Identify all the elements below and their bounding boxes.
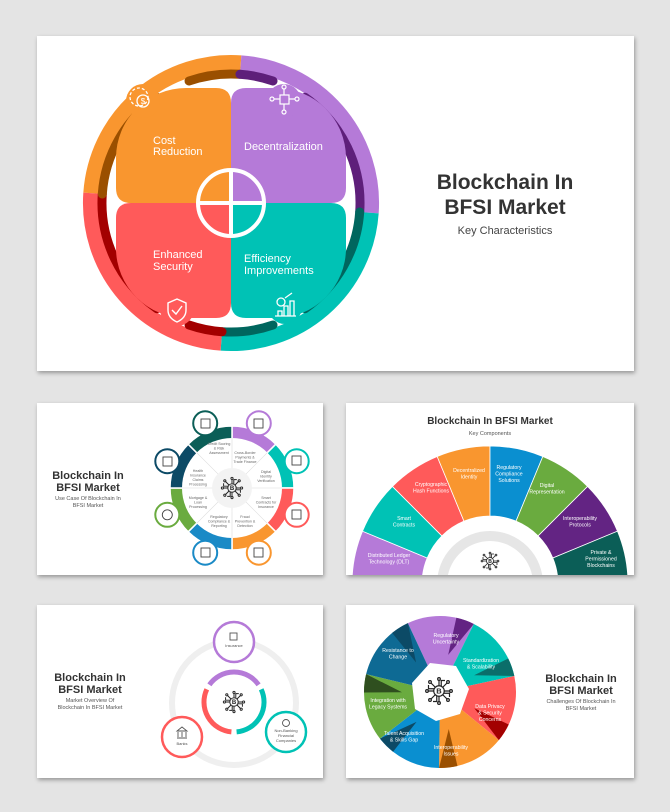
dark inner arcs: [102, 74, 360, 332]
fan labels: Hash Functions: [413, 488, 449, 494]
pinwheel labels: Regulatory: [433, 633, 459, 639]
pinwheel: [344, 598, 527, 786]
fan labels: Cryptographic: [415, 482, 448, 488]
use case labels: Assessment: [209, 451, 229, 455]
use case labels: Insurance: [190, 474, 206, 478]
pinwheel labels: Data Privacy: [475, 704, 505, 710]
title: Blockchain In BFSI Market: [427, 416, 553, 427]
ring: [157, 413, 307, 563]
pinwheel labels: Issues: [444, 752, 459, 758]
title: BFSI Market: [444, 196, 566, 219]
fan labels: Representation: [529, 490, 565, 496]
icon: gear dollar: [130, 88, 149, 107]
fan chart: [352, 446, 628, 575]
title: Key Components: [469, 431, 511, 437]
use case labels: Processing: [189, 482, 207, 486]
cycle diagram: Companies: [276, 738, 296, 743]
title: BFSI Market: [56, 482, 120, 494]
use case labels: Processing: [189, 505, 207, 509]
fan labels: Technology (DLT): [369, 560, 410, 566]
title: Market Overview Of: [66, 698, 115, 704]
use case labels: [189, 442, 277, 528]
labels: Efficiency: [244, 253, 291, 265]
use case labels: Detection: [237, 524, 253, 528]
slide: key components: [344, 402, 638, 580]
slide: use cases: [37, 403, 323, 575]
pinwheel labels: Concerns: [479, 717, 502, 723]
pinwheel labels: Legacy Systems: [369, 704, 407, 710]
icon: chart: [275, 293, 296, 316]
use case labels: Credit Scoring: [208, 442, 230, 446]
fan labels: [368, 465, 617, 569]
pinwheel labels: Uncertainty: [433, 640, 460, 646]
fan labels: Interoperability: [563, 516, 597, 522]
slide: challenges: [344, 598, 634, 786]
use case labels: Payments &: [235, 456, 255, 460]
labels: Decentralization: [244, 141, 323, 153]
title: Blockchain In: [52, 470, 124, 482]
icon: shield: [168, 299, 186, 322]
cycle diagram: Financial: [278, 733, 294, 738]
pinwheel labels: Resistance to: [382, 648, 414, 654]
labels: Reduction: [153, 146, 203, 158]
cycle diagram: Banks: [176, 741, 188, 746]
title: [545, 673, 617, 712]
pinwheel labels: Talent Acquisition: [384, 731, 424, 737]
fan labels: Identity: [461, 474, 478, 480]
fan labels: Regulatory: [496, 465, 522, 471]
use case labels: & Risk: [214, 446, 224, 450]
main slide: [37, 36, 634, 371]
title: [427, 416, 553, 437]
use case labels: Verification: [257, 479, 275, 483]
title: Blockchain In: [54, 672, 126, 684]
title: BFSI Market: [58, 684, 122, 696]
pinwheel labels: Change: [389, 654, 407, 660]
labels: Cost: [153, 135, 176, 147]
cycle diagram: [162, 622, 306, 765]
cycle diagram: Insurance: [225, 643, 244, 648]
labels: Improvements: [244, 265, 314, 277]
pinwheel labels: & Skills Gap: [390, 738, 418, 744]
use case labels: Trade Finance: [233, 460, 257, 464]
fan labels: Digital: [540, 483, 554, 489]
title: Challenges Of Blockchain In: [546, 699, 616, 705]
use case labels: Contracts for: [256, 500, 277, 504]
use case labels: Smart: [261, 496, 271, 500]
fan labels: Protocols: [569, 522, 591, 528]
labels: Security: [153, 261, 193, 273]
fan labels: Compliance: [495, 472, 523, 478]
cycle diagram: Non-Banking: [274, 728, 298, 733]
use case labels: Claims: [193, 478, 204, 482]
pinwheel labels: [369, 633, 505, 758]
title: [54, 672, 126, 711]
title: BFSI Market: [549, 685, 613, 697]
title: Blockchain In BFSI Market: [58, 705, 123, 711]
fan labels: Distributed Ledger: [368, 553, 410, 559]
pinwheel labels: Integration with: [370, 698, 406, 704]
title: Key Characteristics: [458, 225, 553, 237]
title: Blockchain In: [437, 171, 573, 194]
outer ring band: [91, 63, 371, 343]
title: BFSI Market: [73, 503, 104, 509]
title: Use Case Of Blockchain In: [55, 496, 121, 502]
use case labels: Prevention &: [235, 520, 256, 524]
slide: market overview: [37, 605, 323, 778]
fan labels: Smart: [397, 516, 411, 522]
use case labels: Mortgage &: [189, 496, 208, 500]
labels: [153, 135, 323, 277]
use case labels: Digital: [261, 470, 271, 474]
icon circles: [155, 411, 309, 565]
use case labels: Loan: [194, 500, 202, 504]
fan labels: Permissioned: [585, 556, 617, 562]
use case labels: Reporting: [211, 524, 227, 528]
fan labels: Solutions: [498, 478, 520, 484]
labels: Enhanced: [153, 249, 203, 261]
use case labels: Fraud: [240, 515, 250, 519]
pinwheel labels: Standardization: [463, 658, 499, 664]
title: [437, 171, 573, 237]
use case labels: Regulatory: [210, 515, 228, 519]
pinwheel labels: & Security: [478, 710, 502, 716]
fan labels: Contracts: [393, 522, 416, 528]
fan labels: Private &: [590, 550, 612, 556]
pinwheel labels: & Scalability: [467, 664, 496, 670]
title: Blockchain In: [545, 673, 617, 685]
title: BFSI Market: [566, 706, 597, 712]
icon: network: [270, 85, 299, 114]
use case labels: Identity: [260, 474, 272, 478]
center circle: [198, 170, 264, 236]
pinwheel labels: Interoperability: [434, 745, 468, 751]
title: [52, 470, 124, 509]
use case labels: Compliance &: [208, 520, 231, 524]
fan labels: Blockchains: [587, 563, 615, 569]
quadrant blob: [116, 84, 346, 326]
use case labels: Health: [193, 469, 203, 473]
fan labels: Decentralized: [453, 468, 485, 474]
use case labels: Cross-Border: [234, 451, 256, 455]
use case labels: Insurance: [258, 505, 274, 509]
icon: gear dollar: $: [141, 97, 146, 106]
